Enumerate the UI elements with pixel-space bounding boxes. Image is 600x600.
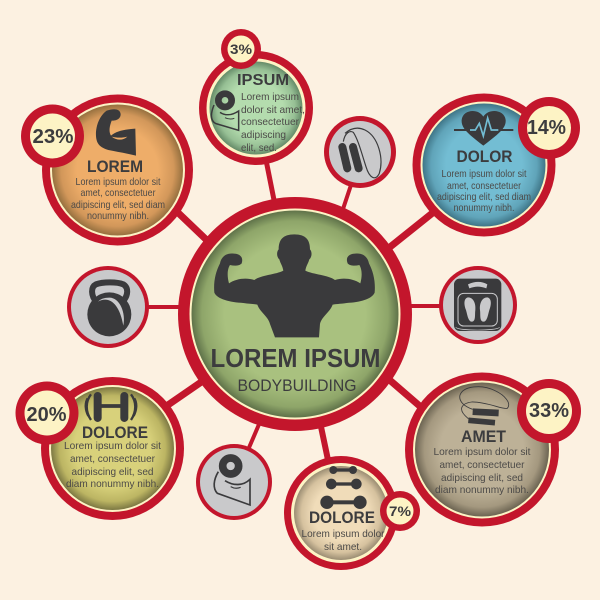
badge: 33%: [517, 379, 581, 443]
panel: lorem: [42, 94, 193, 246]
body text: diam nonummy nibh.: [435, 484, 529, 496]
body text: consectetuer: [241, 116, 299, 128]
body text: [437, 168, 531, 214]
panel: kettlebell circle: [67, 266, 149, 348]
body text: Lorem ipsum dolor sit: [64, 440, 161, 452]
panel: ipsum: [199, 51, 313, 165]
body text: Lorem ipsum dolor: [302, 528, 385, 540]
body text: Lorem ipsum dolor sit: [434, 446, 531, 458]
icon: barbell: [86, 394, 136, 420]
body text: amet, consectetuer: [70, 453, 155, 465]
icon: flexed arm: [96, 109, 136, 156]
body text: adipiscing elit, sed diam: [71, 199, 165, 211]
heading: DOLOR: [456, 147, 512, 166]
body text: [64, 440, 161, 490]
panel: dolore 20: [41, 377, 184, 520]
badge: 3%: [221, 29, 261, 69]
icon: arm with weight plate: [211, 94, 239, 130]
body text: elit, sed.: [241, 142, 277, 154]
icon: kettlebell: [87, 282, 131, 336]
body text: Lorem ipsum: [241, 91, 299, 103]
body text: amet, consectetuer: [80, 187, 156, 199]
panel: central circle: [178, 197, 412, 431]
panel: jump rope circle: [324, 116, 396, 188]
panel: weight scale circle: [439, 266, 517, 344]
icon: arm with weight plate: [214, 458, 250, 505]
panel: dolore 7: [284, 456, 398, 570]
badge: 3%: 3%: [230, 41, 253, 57]
subheading: bodybuilding: BODYBUILDING: [238, 376, 356, 395]
heading: IPSUM: [237, 72, 289, 89]
badge: 14%: [518, 97, 580, 159]
body text: diam nonummy nibh.: [66, 478, 159, 490]
body text: adipiscing elit, sed: [441, 472, 523, 484]
panel: dolor: [412, 94, 556, 236]
body text: Lorem ipsum dolor sit: [76, 176, 161, 188]
body text: amet, consectetuer: [440, 459, 525, 471]
badge: 7%: [380, 491, 420, 531]
icon: three dumbbells: [320, 466, 367, 509]
body text: adipiscing: [241, 129, 286, 141]
icon: heart with pulse: [454, 111, 513, 146]
badge: 14%: 14%: [527, 117, 566, 139]
body text: Lorem ipsum dolor sit: [442, 168, 527, 180]
body text: nonummy nibh.: [87, 210, 149, 222]
badge: 23%: 23%: [32, 126, 74, 148]
panel: arm with plate circle: [196, 444, 272, 520]
body text: amet, consectetuer: [447, 180, 521, 192]
body text: [302, 528, 385, 553]
body text: adipiscing elit, sed: [72, 466, 154, 478]
badge: 20%: [16, 382, 78, 444]
icon: bodybuilder silhouette: [214, 234, 375, 337]
body text: adipiscing elit, sed diam: [437, 191, 531, 203]
heading: lorem ipsum: LOREM IPSUM: [210, 343, 380, 373]
icon: jump rope: [342, 128, 381, 178]
body text: [71, 176, 165, 222]
body text: nonummy nibh.: [454, 202, 514, 214]
badge: 33%: 33%: [529, 400, 569, 422]
icon: weight scale: [454, 279, 501, 331]
connector lines: [145, 160, 445, 460]
heading: AMET: [461, 427, 507, 446]
heading: DOLORE: [309, 508, 375, 527]
heading: DOLORE: [82, 423, 148, 442]
badge: 7%: 7%: [389, 503, 412, 519]
body text: [241, 91, 305, 154]
badge: 23%: [21, 104, 84, 168]
body text: sit amet.: [324, 541, 362, 553]
icon: jump rope: [460, 387, 509, 423]
body text: dolor sit amet,: [241, 104, 305, 116]
badge: 20%: 20%: [26, 404, 67, 426]
panel: amet: [405, 372, 559, 526]
body text: [434, 446, 531, 496]
heading: LOREM: [87, 157, 143, 176]
